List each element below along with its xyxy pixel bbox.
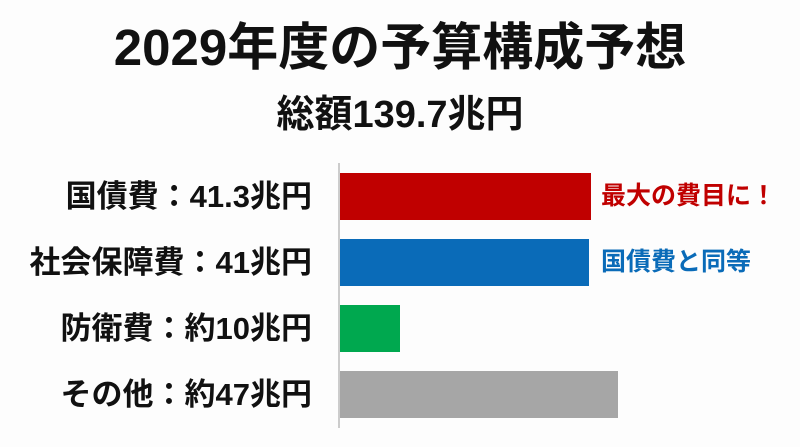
bar: 国債費: [340, 173, 591, 220]
bar chart: [30, 163, 776, 428]
label: 社会保障費: 社会保障費：41兆円: [30, 245, 312, 280]
title: 2029年度の予算構成予想: [114, 19, 686, 76]
label: 防衛費: 防衛費：約10兆円: [61, 311, 312, 346]
label: 国債費: 国債費：41.3兆円: [66, 179, 312, 214]
bar: 防衛費: [340, 305, 400, 352]
bar: その他: [340, 371, 618, 418]
note: 国債費と同等: 国債費と同等: [601, 248, 751, 276]
note: 最大の費目に: 最大の費目に！: [601, 182, 776, 210]
bar: 社会保障費: [340, 239, 589, 286]
label: その他: その他：約47兆円: [61, 377, 312, 412]
subtitle: total: 総額139.7兆円: [276, 94, 524, 136]
axis line: [338, 163, 340, 428]
